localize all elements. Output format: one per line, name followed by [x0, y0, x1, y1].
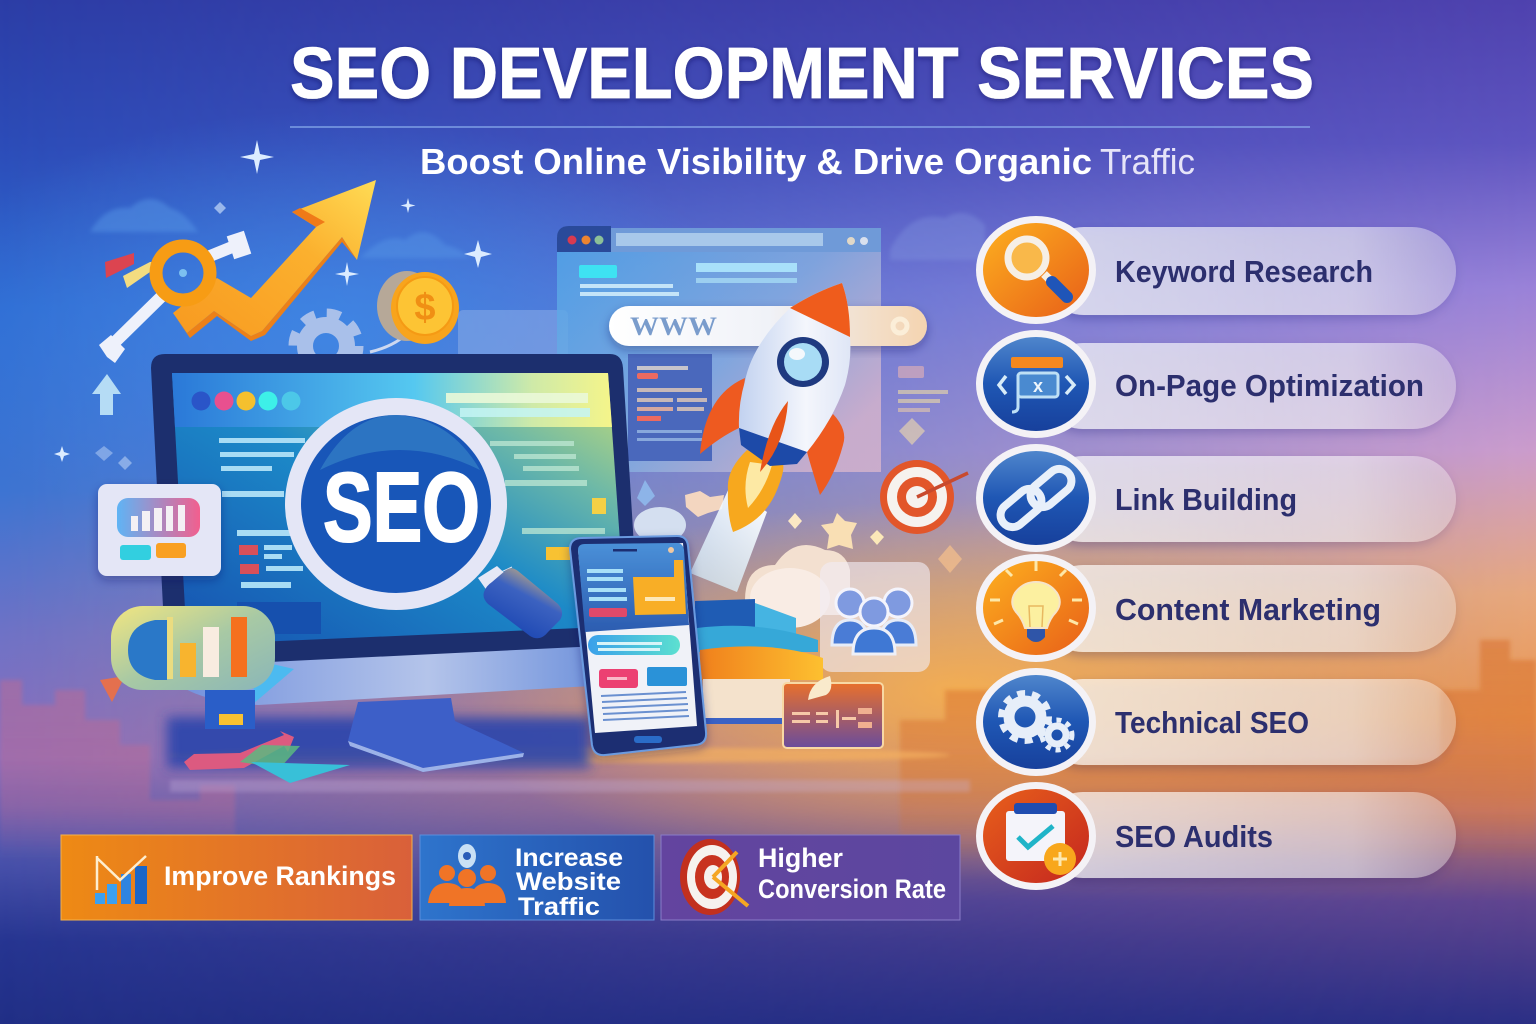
benefit: Higher Conversion Rate: [661, 835, 960, 920]
dollar coin: [370, 271, 459, 352]
decorative clouds and stars: [634, 480, 962, 573]
service: SEO Audits: [976, 782, 1456, 890]
icon: chain link: [996, 464, 1076, 532]
up arrow: [92, 374, 121, 415]
dollar coin: $: [414, 287, 436, 329]
icon: gears: [1001, 693, 1072, 750]
target: [880, 460, 968, 534]
faded panel behind: [458, 310, 568, 370]
decorative sparkles: [54, 140, 492, 470]
analytics card: [98, 484, 221, 576]
icon: audience: [428, 844, 506, 906]
service: Technical SEO: Technical SEO: [1115, 705, 1309, 740]
title: SEO DEVELOPMENT SERVICES: [290, 34, 1314, 114]
service: Content Marketing: Content Marketing: [1115, 592, 1381, 627]
icon: page code: x: [1033, 376, 1043, 396]
icon: magnifier: [1008, 239, 1067, 297]
icon: rising bars: [95, 856, 147, 904]
smartphone: [570, 536, 706, 755]
browser window: [557, 226, 881, 472]
SEO magnifying glass: [285, 398, 562, 638]
benefit: Improve Rankings: Improve Rankings: [164, 861, 396, 891]
service: Content Marketing: [976, 554, 1456, 662]
growth arrow with wrench: [99, 180, 376, 363]
service: Keyword Research: [976, 216, 1456, 324]
monitor: [151, 354, 645, 772]
benefit: Higher Conversion Rate: Higher: [758, 843, 843, 873]
icon: page code: [999, 357, 1074, 412]
rocket: [700, 283, 850, 532]
benefit: Increase Website Traffic: Traffic: [518, 893, 600, 921]
chart speech bubble: [100, 606, 294, 729]
gear: [293, 313, 359, 379]
subtitle: Traffic: [1100, 141, 1195, 182]
rocket exhaust trail: [690, 486, 767, 592]
icon: audit checklist: [1006, 803, 1076, 875]
www search bar: [609, 306, 927, 346]
service: Link Building: Link Building: [1115, 482, 1297, 517]
benefit: Higher Conversion Rate: Conversion Rate: [758, 874, 946, 904]
benefit: Increase Website Traffic: [420, 835, 654, 921]
SEO magnifying glass: SEO: [323, 452, 480, 562]
team card: [820, 562, 930, 672]
service: On-Page Optimization: On-Page Optimization: [1115, 368, 1424, 403]
benefit: Increase Website Traffic: Website: [516, 868, 621, 896]
service: Technical SEO: [976, 668, 1456, 776]
www search bar: WWW: [630, 312, 717, 341]
bottom arrow and folders: [184, 731, 350, 783]
title divider: [290, 126, 1310, 128]
service: Keyword Research: Keyword Research: [1115, 254, 1373, 289]
benefit: Improve Rankings: [61, 835, 412, 920]
orange note card: [783, 676, 883, 748]
service: SEO Audits: SEO Audits: [1115, 819, 1273, 854]
stacked books platform: [695, 599, 823, 724]
subtitle: Boost Online Visibility & Drive Organic: [420, 141, 1092, 182]
cloud puffs: [745, 545, 850, 628]
benefit: Increase Website Traffic: Increase: [515, 844, 623, 872]
faint side text blocks: [898, 366, 948, 445]
icon: target and dart: [680, 839, 748, 915]
icon: light bulb: [990, 561, 1082, 642]
service: On-Page Optimization: [976, 330, 1456, 438]
service: Link Building: [976, 444, 1456, 552]
